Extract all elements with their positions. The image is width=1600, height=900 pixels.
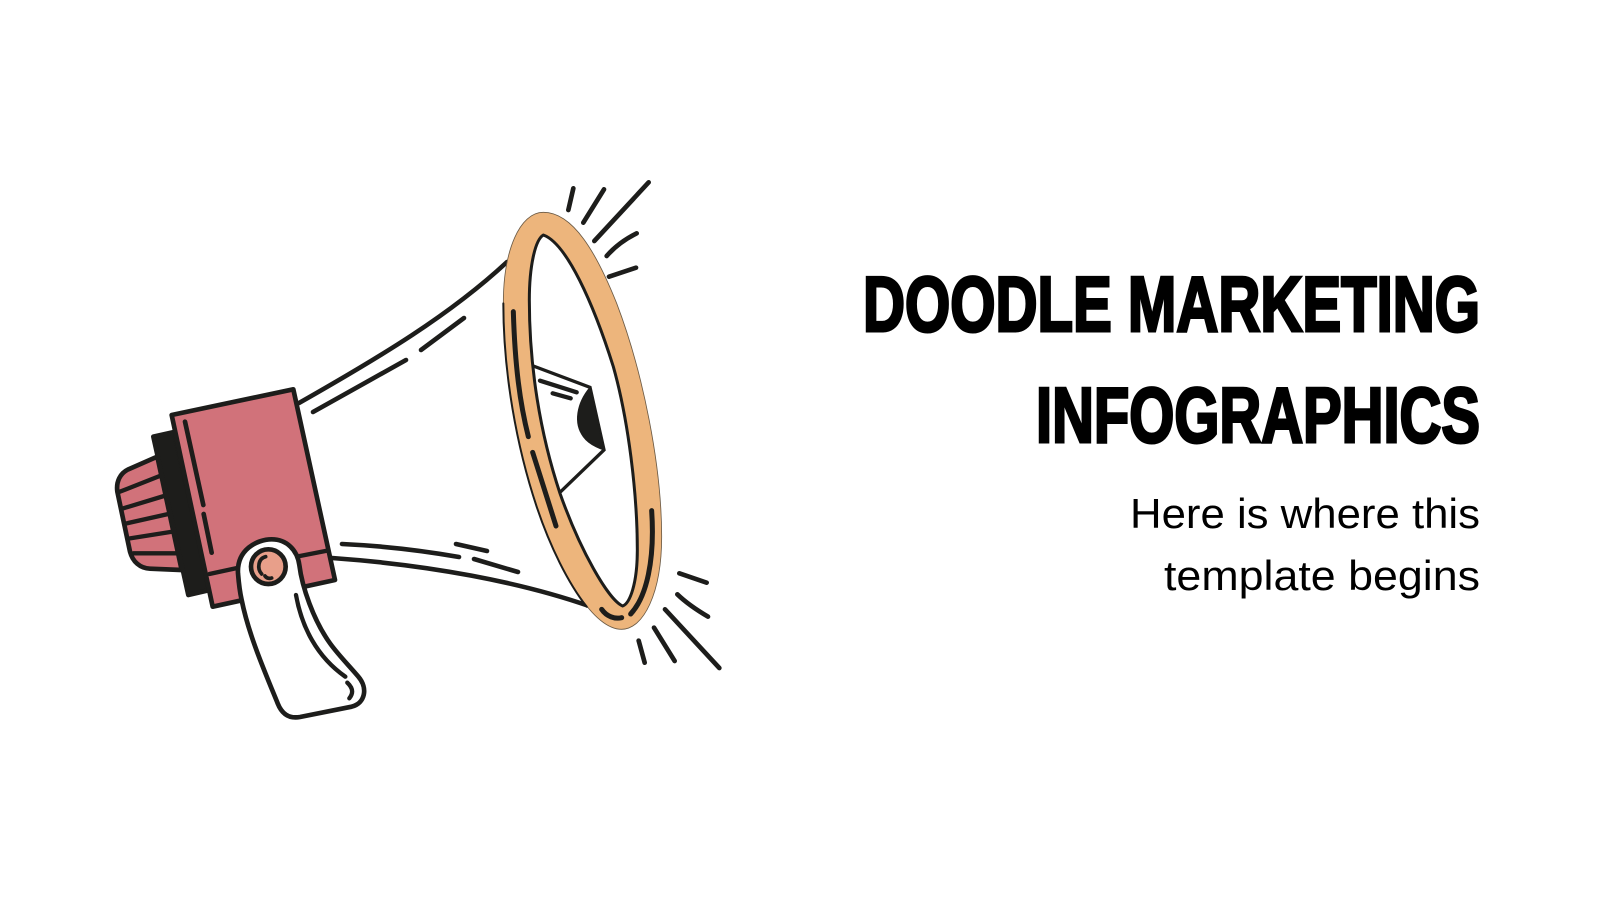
speaker ribs [120, 476, 177, 553]
pivot screw [251, 549, 286, 584]
bottom sound rays [639, 573, 719, 668]
opening detail lines [540, 381, 577, 398]
bell ring [503, 212, 662, 629]
rear speaker cap [117, 457, 182, 570]
ring highlights [513, 312, 652, 618]
black plate [153, 432, 210, 595]
megaphone body and handle [117, 389, 364, 717]
handle [238, 539, 364, 717]
megaphone cone lines [299, 262, 589, 606]
envelope shape in opening [533, 366, 604, 492]
handle highlights [296, 595, 352, 698]
megaphone bell and sound rays [503, 182, 719, 668]
pivot screw highlight [259, 557, 272, 578]
bell opening [529, 235, 637, 606]
housing highlights [185, 422, 212, 553]
red housing [172, 389, 335, 607]
illustration: megaphone [117, 182, 719, 717]
title [863, 260, 1480, 459]
black envelope flap [578, 387, 604, 450]
bell ring left outline [503, 303, 587, 607]
subtitle: Here is where this [1130, 490, 1480, 537]
housing band [209, 551, 327, 574]
subtitle [1130, 490, 1480, 599]
subtitle: template begins [1164, 552, 1480, 599]
top sound rays [568, 182, 649, 277]
